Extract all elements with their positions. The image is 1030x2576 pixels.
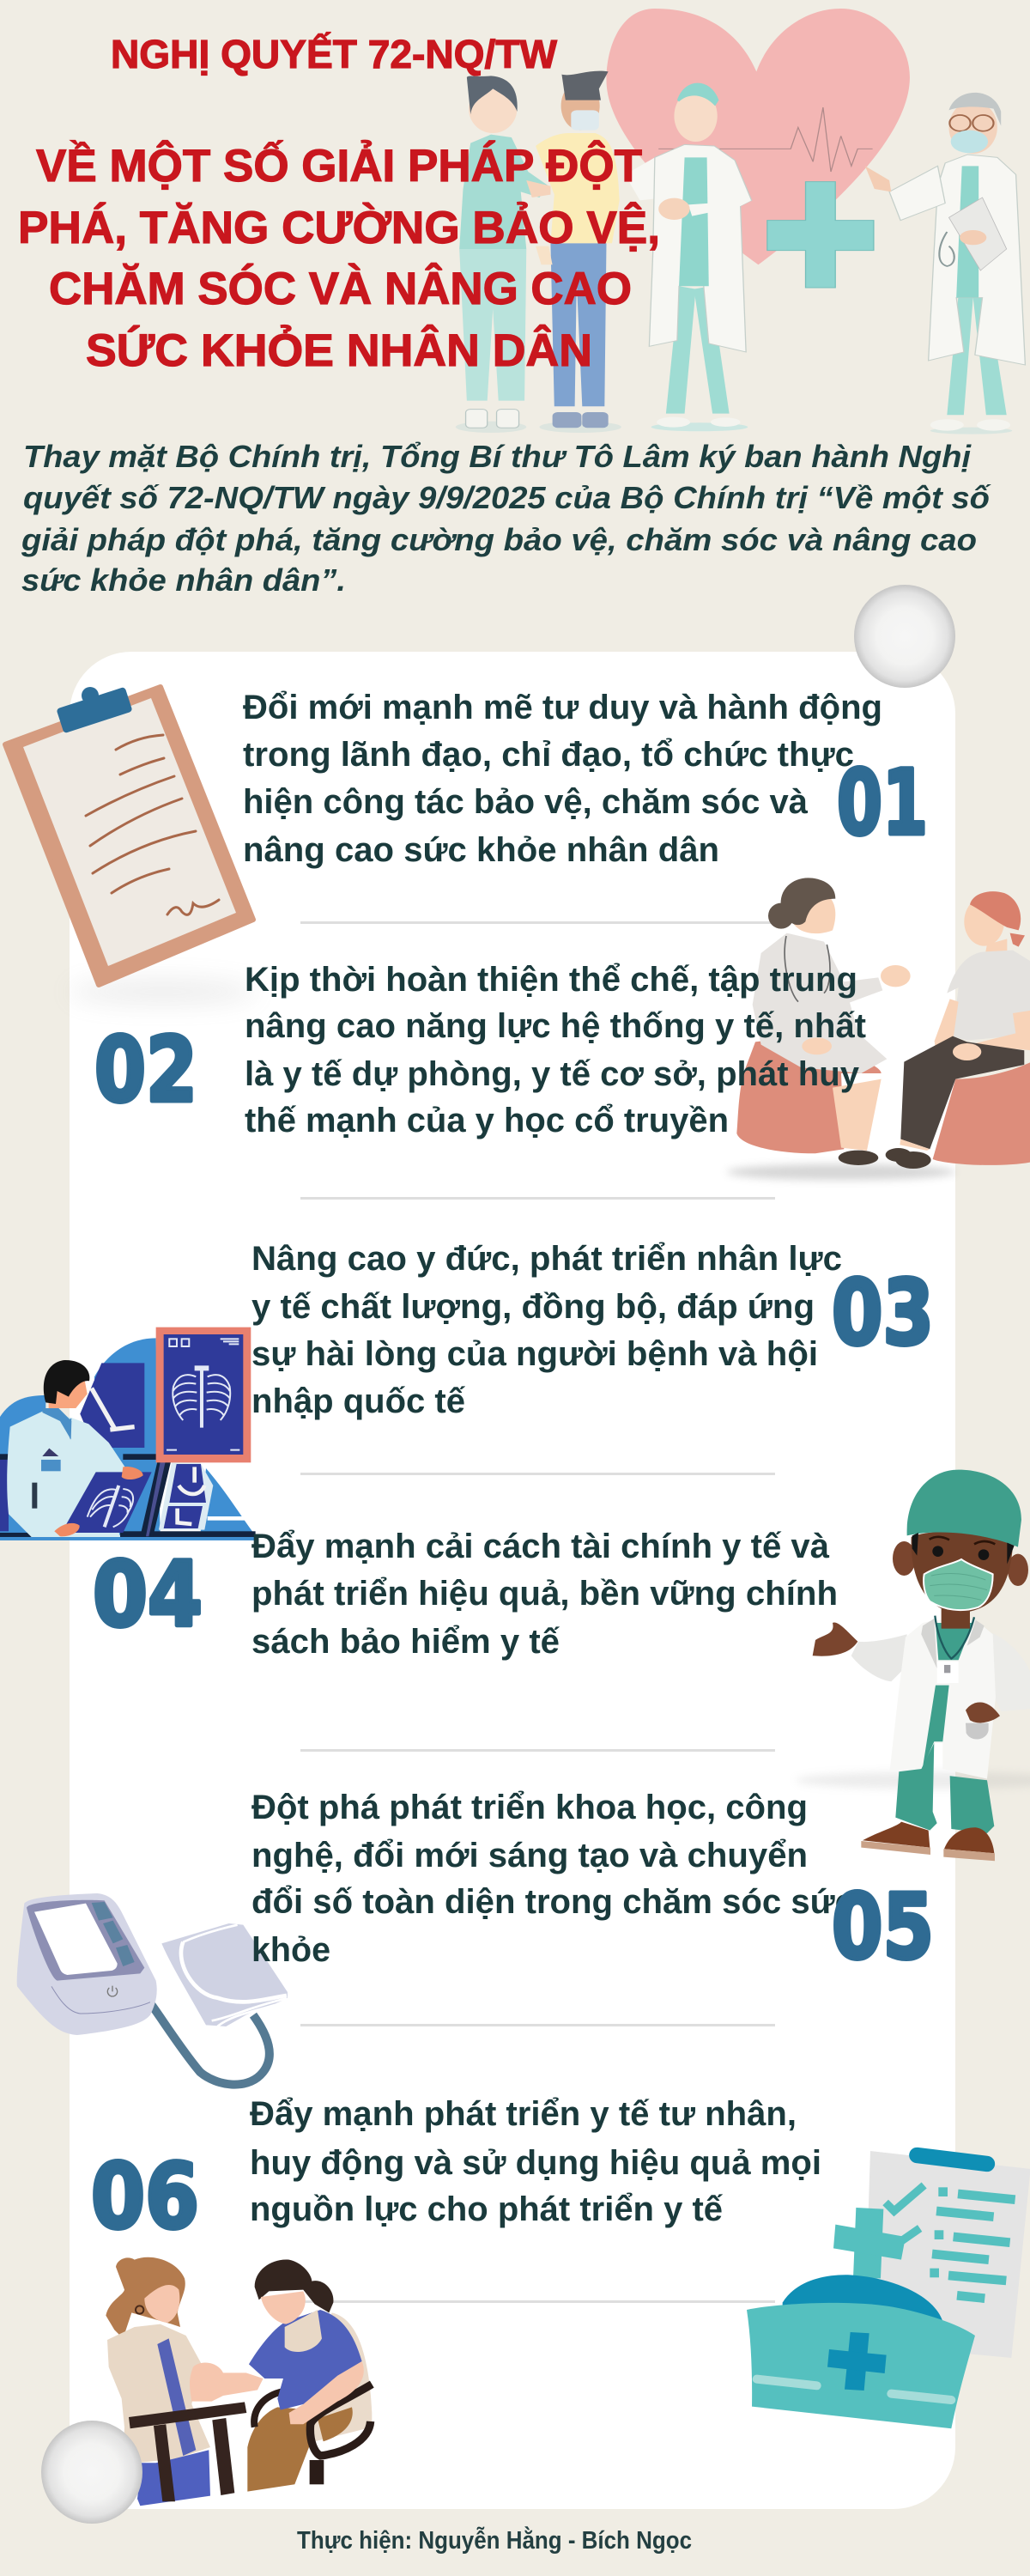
number 01: 01 [837,750,928,855]
title: resolution subject: CHĂM SÓC VÀ NÂNG CAO [49,262,632,314]
item 02 text: thế mạnh của y học cổ truyền [245,1102,729,1139]
item 01 text: trong lãnh đạo, chỉ đạo, tổ chức thực [243,736,854,774]
item 01 text: Đổi mới mạnh mẽ tư duy và hành động [243,689,882,726]
icon: nurse giving injection [106,2257,372,2506]
item 06 text: huy động và sử dụng hiệu quả mọi [250,2144,821,2182]
item 05 text: khỏe [251,1931,330,1969]
title: resolution subject: PHÁ, TĂNG CƯỜNG BẢO VỆ, [18,201,660,253]
item 04 text: phát triển hiệu quả, bền vững chính [251,1575,838,1613]
number 02: 02 [94,1018,197,1122]
item 06 text: Đẩy mạnh phát triển y tế tư nhân, [250,2095,797,2133]
title: resolution subject [18,139,660,376]
item 02 text: Kịp thời hoàn thiện thể chế, tập trung [245,961,857,999]
item 06 text [250,2095,821,2228]
item 03 text: y tế chất lượng, đồng bộ, đáp ứng [251,1288,815,1326]
item 02 text [245,961,866,1139]
item 06 text: nguồn lực cho phát triển y tế [250,2190,724,2228]
item 04 text: Đẩy mạnh cải cách tài chính y tế và [251,1528,830,1565]
icon: clipboard [5,687,258,1004]
item 05 text: nghệ, đổi mới sáng tạo và chuyển [251,1837,808,1874]
panel: white card [70,652,955,2509]
intro paragraph: quyết số 72-NQ/TW ngày 9/9/2025 của Bộ Chính trị “Về một số [23,480,991,515]
item 03 text [251,1240,842,1420]
item 05 text: đổi số toàn diện trong chăm sóc sức [251,1883,854,1921]
intro paragraph [21,439,991,598]
item 04 text: sách bảo hiểm y tế [251,1623,560,1661]
intro paragraph: Thay mặt Bộ Chính trị, Tổng Bí thư Tô Lâm ký ban hành Nghị [23,439,972,474]
number 04: 04 [93,1542,203,1647]
item 05 text: Đột phá phát triển khoa học, công [251,1789,808,1826]
item 03 text: sự hài lòng của người bệnh và hội [251,1335,818,1373]
title: resolution subject: SỨC KHỎE NHÂN DÂN [86,324,592,376]
icon: header medical team with heart [456,9,1025,434]
icon: top pearl [854,585,955,688]
intro paragraph: giải pháp đột phá, tăng cường bảo vệ, chăm sóc và nâng cao [21,522,977,557]
item 01 text [243,689,882,869]
number 06: 06 [91,2144,199,2249]
number 03: 03 [832,1261,934,1365]
icon: doctor with green cap and mask [796,1470,1030,1861]
icon: doctor and patient [727,878,1030,1180]
title: resolution subject: VỀ MỘT SỐ GIẢI PHÁP ĐỘT [36,139,642,191]
item 04 text [251,1528,838,1661]
item 03 text: Nâng cao y đức, phát triển nhân lực [251,1240,842,1278]
item 01 text: nâng cao sức khỏe nhân dân [243,831,719,869]
item 05 text [251,1789,854,1969]
number 05: 05 [832,1874,934,1979]
title: resolution number: NGHỊ QUYẾT 72-NQ/TW [111,32,558,76]
item 02 text: nâng cao năng lực hệ thống y tế, nhất [245,1007,866,1045]
item 02 text: là y tế dự phòng, y tế cơ sở, phát huy [245,1055,860,1093]
item 03 text: nhập quốc tế [251,1382,466,1420]
footer credit: Thực hiện: Nguyễn Hằng - Bích Ngọc [297,2525,692,2555]
icon: nurse cap and checklist [747,2151,1030,2428]
icon: x-ray technician [0,1327,256,1540]
icon: blood pressure monitor [17,1893,288,2085]
item 01 text: hiện công tác bảo vệ, chăm sóc và [243,783,809,821]
intro paragraph: sức khỏe nhân dân”. [21,562,346,598]
icon: bottom pearl [41,2421,142,2524]
